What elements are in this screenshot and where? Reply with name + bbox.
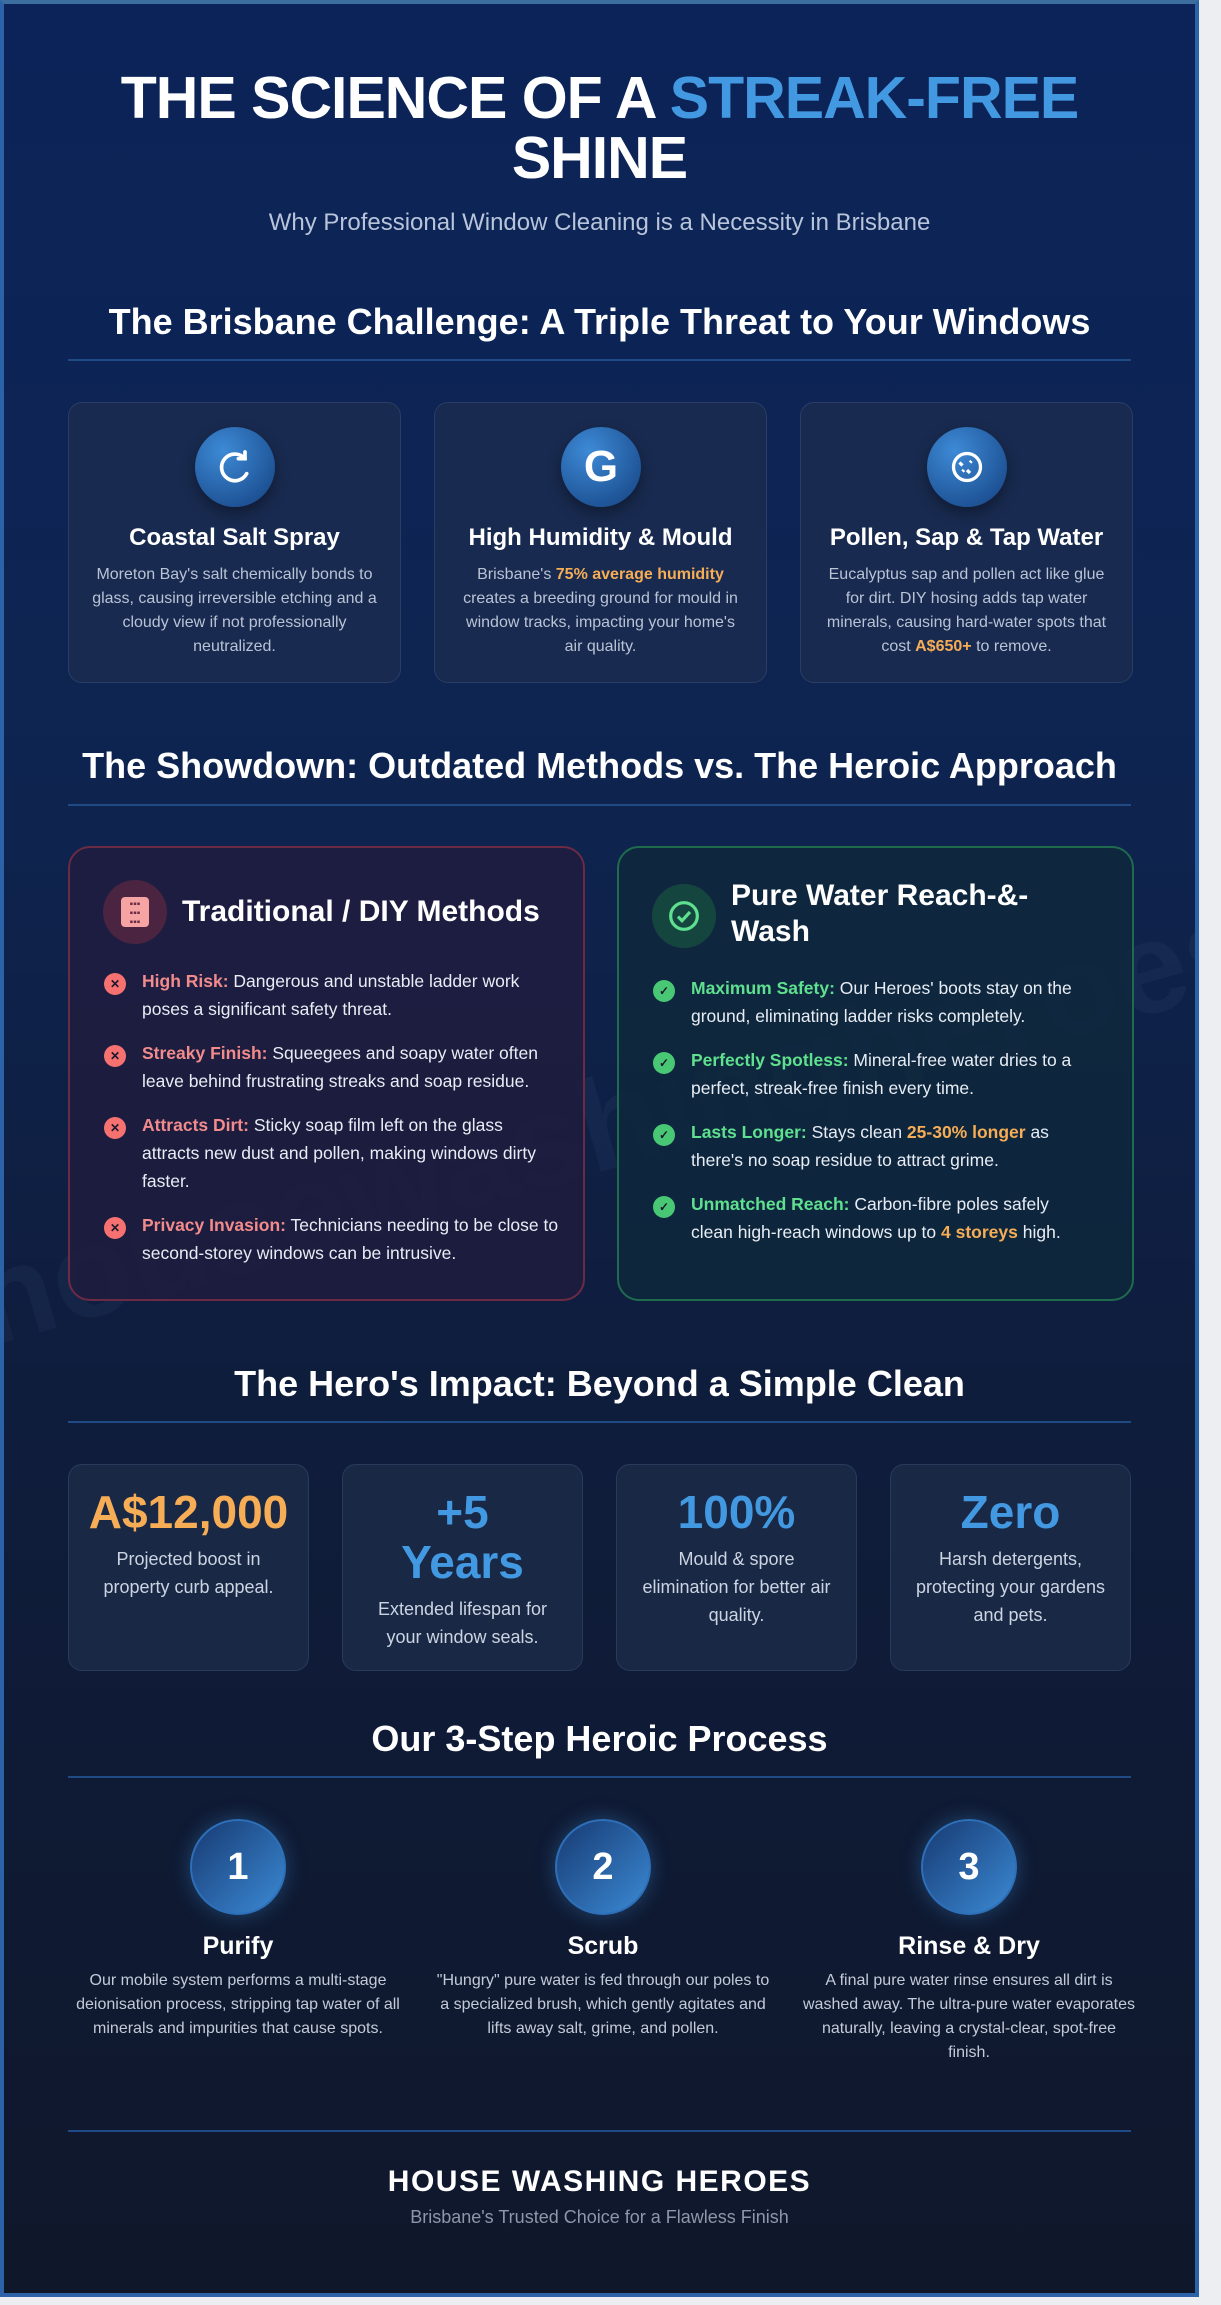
heading: process: Our 3-Step Heroic Process (371, 1718, 828, 1759)
list: ✓ (659, 984, 669, 998)
card title: High Humidity & Mould (469, 524, 732, 551)
list: ✓ (659, 1056, 669, 1070)
step 2: "Hungry" pure water is fed through our poles to a specialized brush, which gently agitates and lifts away salt, grime, and pollen. (437, 1972, 769, 2037)
stat: zero: Harsh detergents, protecting your gardens and pets. (916, 1549, 1105, 1625)
panel: humidity (434, 402, 767, 683)
stat: zero (890, 1464, 1131, 1671)
list: ✕ (110, 1221, 120, 1235)
stat: curb appeal (68, 1464, 309, 1671)
footer tagline: Brisbane's Trusted Choice for a Flawless Finish (410, 2207, 789, 2227)
icon: refresh (195, 427, 275, 507)
stat: years: Extended lifespan for your window seals. (378, 1599, 547, 1647)
list: Streaky Finish: Squeegees and soapy water often leave behind frustrating streaks and soap residue. (142, 1043, 538, 1091)
stat: curb appeal: A$12,000 (89, 1486, 288, 1538)
subtitle: Why Professional Window Cleaning is a Necessity in Brisbane (269, 209, 930, 236)
step 3: A final pure water rinse ensures all dirt is washed away. The ultra-pure water evaporates naturally, leaving a crystal-clear, spot-free finish. (803, 1972, 1135, 2061)
stat: curb appeal: Projected boost in property curb appeal. (103, 1549, 274, 1597)
card title: Pollen, Sap & Tap Water (830, 524, 1103, 551)
title: SHINE (512, 125, 687, 191)
card body: Eucalyptus sap and pollen act like glue for dirt. DIY hosing adds tap water minerals, causing hard-water spots that cost A$650+ to remove. (827, 566, 1106, 655)
icon: check (652, 884, 716, 948)
panel: pure water (617, 846, 1134, 1301)
step 3 (803, 1810, 1135, 2061)
heading: impact: The Hero's Impact: Beyond a Simple Clean (234, 1363, 965, 1404)
list: Privacy Invasion: Technicians needing to be close to second-storey windows can be intrusive. (142, 1215, 558, 1263)
icon: no-symbol (927, 427, 1007, 507)
card body: Brisbane's 75% average humidity creates a breeding ground for mould in window tracks, impacting your home's air quality. (463, 566, 738, 655)
step 1: Our mobile system performs a multi-stage deionisation process, stripping tap water of all minerals and impurities that cause spots. (76, 1972, 400, 2037)
card body: Moreton Bay's salt chemically bonds to glass, causing irreversible etching and a cloudy view if not professionally neutralized. (92, 566, 377, 655)
step 1: 1 (227, 1846, 249, 1888)
step 2 (437, 1810, 769, 2037)
list: High Risk: Dangerous and unstable ladder work poses a significant safety threat. (142, 971, 519, 1019)
stat: 100%: Mould & spore elimination for better air quality. (642, 1549, 831, 1625)
panel: coastal salt spray (68, 402, 401, 683)
footer brand: HOUSE WASHING HEROES (388, 2165, 811, 2198)
icon: G (561, 427, 641, 507)
list: Maximum Safety: Our Heroes' boots stay on the ground, eliminating ladder risks completely. (691, 978, 1072, 1026)
icon: building: ▪▪▪ (130, 899, 140, 910)
step 1: Purify (203, 1932, 273, 1960)
icon: building: ▪▪▪ (130, 908, 140, 919)
list: ✕ (110, 1121, 120, 1135)
heading: showdown: The Showdown: Outdated Methods vs. The Heroic Approach (82, 745, 1117, 786)
heading: Brisbane challenge: The Brisbane Challenge: A Triple Threat to Your Windows (109, 301, 1090, 342)
icon: building (103, 880, 167, 944)
stat: 100%: 100% (678, 1486, 795, 1538)
title: THE SCIENCE OF A STREAK-FREE (121, 65, 1078, 131)
list: ✓ (659, 1128, 669, 1142)
stat: years (342, 1464, 583, 1671)
stat: zero: Zero (961, 1486, 1060, 1538)
title (121, 65, 1078, 191)
list: ✕ (110, 1049, 120, 1063)
panel title: Pure Water Reach-&-Wash (731, 879, 1028, 948)
list: Perfectly Spotless: Mineral-free water dries to a perfect, streak-free finish every time. (691, 1050, 1071, 1098)
panel: traditional (68, 846, 585, 1301)
list (653, 978, 1072, 1242)
list: ✓ (659, 1200, 669, 1214)
list: Attracts Dirt: Sticky soap film left on the glass attracts new dust and pollen, making windows dirty faster. (142, 1115, 536, 1191)
stat: 100% (616, 1464, 857, 1671)
step 2: Scrub (568, 1932, 638, 1960)
step 3: 3 (958, 1846, 980, 1888)
step 2: 2 (592, 1846, 614, 1888)
icon: G: G (584, 442, 618, 491)
list: Lasts Longer: Stays clean 25-30% longer as there's no soap residue to attract grime. (691, 1122, 1049, 1170)
card title: Coastal Salt Spray (129, 524, 340, 551)
list (104, 971, 558, 1263)
icon: building: ▪▪▪ (130, 917, 140, 928)
stat: years: Years (401, 1536, 524, 1588)
list: ✕ (110, 977, 120, 991)
panel: pollen (800, 402, 1133, 683)
panel title: Traditional / DIY Methods (182, 895, 540, 928)
stat: years: +5 (436, 1486, 489, 1538)
step 1 (76, 1810, 400, 2037)
list: Unmatched Reach: Carbon-fibre poles safely clean high-reach windows up to 4 storeys high. (691, 1194, 1061, 1242)
step 3: Rinse & Dry (898, 1932, 1040, 1960)
